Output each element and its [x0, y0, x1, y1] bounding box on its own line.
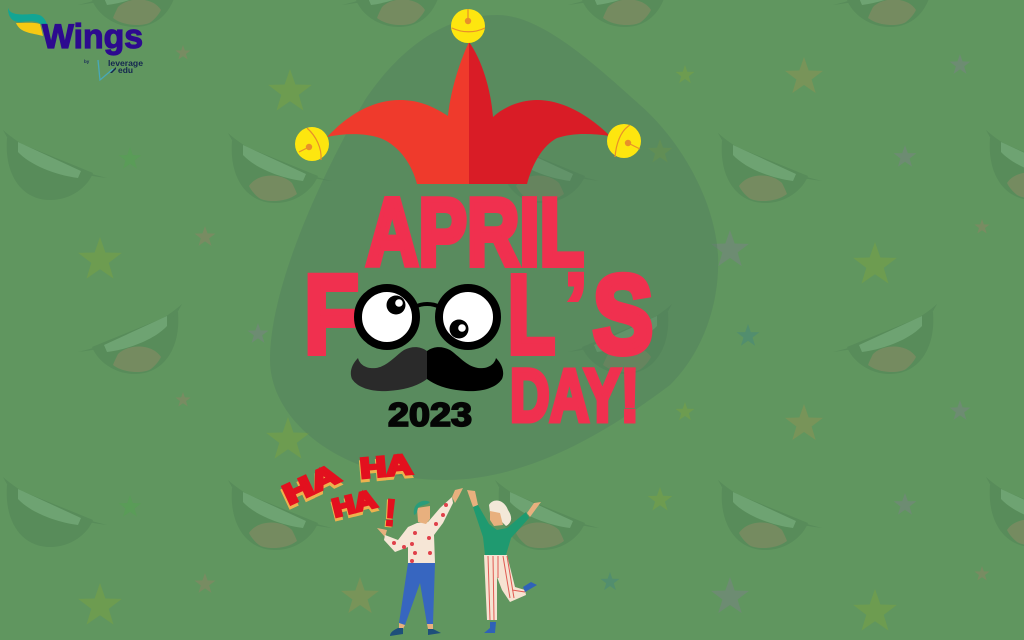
shoes: [390, 628, 441, 636]
illustration: person in green sweater and striped trousers: [467, 490, 541, 633]
hands: [467, 490, 541, 517]
Wings wordmark: Wings: [42, 18, 143, 56]
APRIL: APRIL: [366, 179, 584, 286]
stripes: [488, 556, 525, 620]
HA HA HA lettering: [277, 449, 414, 536]
year: 2023: 2023: [388, 396, 472, 433]
icon: top bell: [451, 9, 485, 43]
first HA: HA: [278, 458, 344, 510]
third HA: HA: [329, 488, 379, 526]
striped trousers: [484, 555, 526, 620]
ankles: [399, 623, 433, 629]
icon: round glasses with googly eyes: [358, 288, 497, 346]
hair: [489, 501, 511, 526]
first HA: [277, 458, 345, 514]
icon: teal and yellow ribbon: [8, 8, 47, 36]
leverage edu mark: [98, 60, 113, 80]
dark blob behind title: [270, 15, 718, 480]
F: F: [304, 254, 358, 376]
title: April Fool's Day: [304, 179, 653, 437]
hat right half: [469, 42, 610, 184]
leverage edu text: leverage: [108, 59, 144, 68]
leverage edu text: edu: [118, 66, 133, 75]
by: by: [84, 59, 90, 64]
second HA: HA: [358, 452, 413, 487]
apostrophe: ’: [562, 252, 590, 364]
head: [490, 511, 503, 526]
second HA: [358, 449, 414, 487]
jester hat: [295, 9, 641, 184]
leverage edu text: [108, 59, 144, 75]
icon: left bell: [295, 127, 329, 161]
icon: right bell: [607, 124, 641, 158]
third HA: HA: [330, 485, 379, 523]
S: S: [593, 254, 653, 376]
icon: moustache: [351, 347, 503, 391]
sweater: [473, 505, 529, 555]
first HA: HA: [278, 461, 344, 514]
trousers: [399, 563, 435, 625]
exclamation mark: !: [381, 493, 397, 536]
second HA: HA: [359, 449, 413, 484]
illustration: person in polka-dot sweater: [377, 488, 463, 636]
logo: Wings by leverage edu: [8, 8, 144, 80]
hands: [377, 488, 463, 537]
hat left half: [327, 42, 469, 184]
L: L: [508, 254, 555, 376]
socks and shoes: [484, 582, 537, 633]
sweater: [384, 497, 453, 563]
DAY!: DAY!: [510, 354, 639, 437]
polka dots: [392, 503, 448, 563]
exclamation mark: !: [382, 492, 398, 535]
head and hair: [417, 506, 430, 524]
